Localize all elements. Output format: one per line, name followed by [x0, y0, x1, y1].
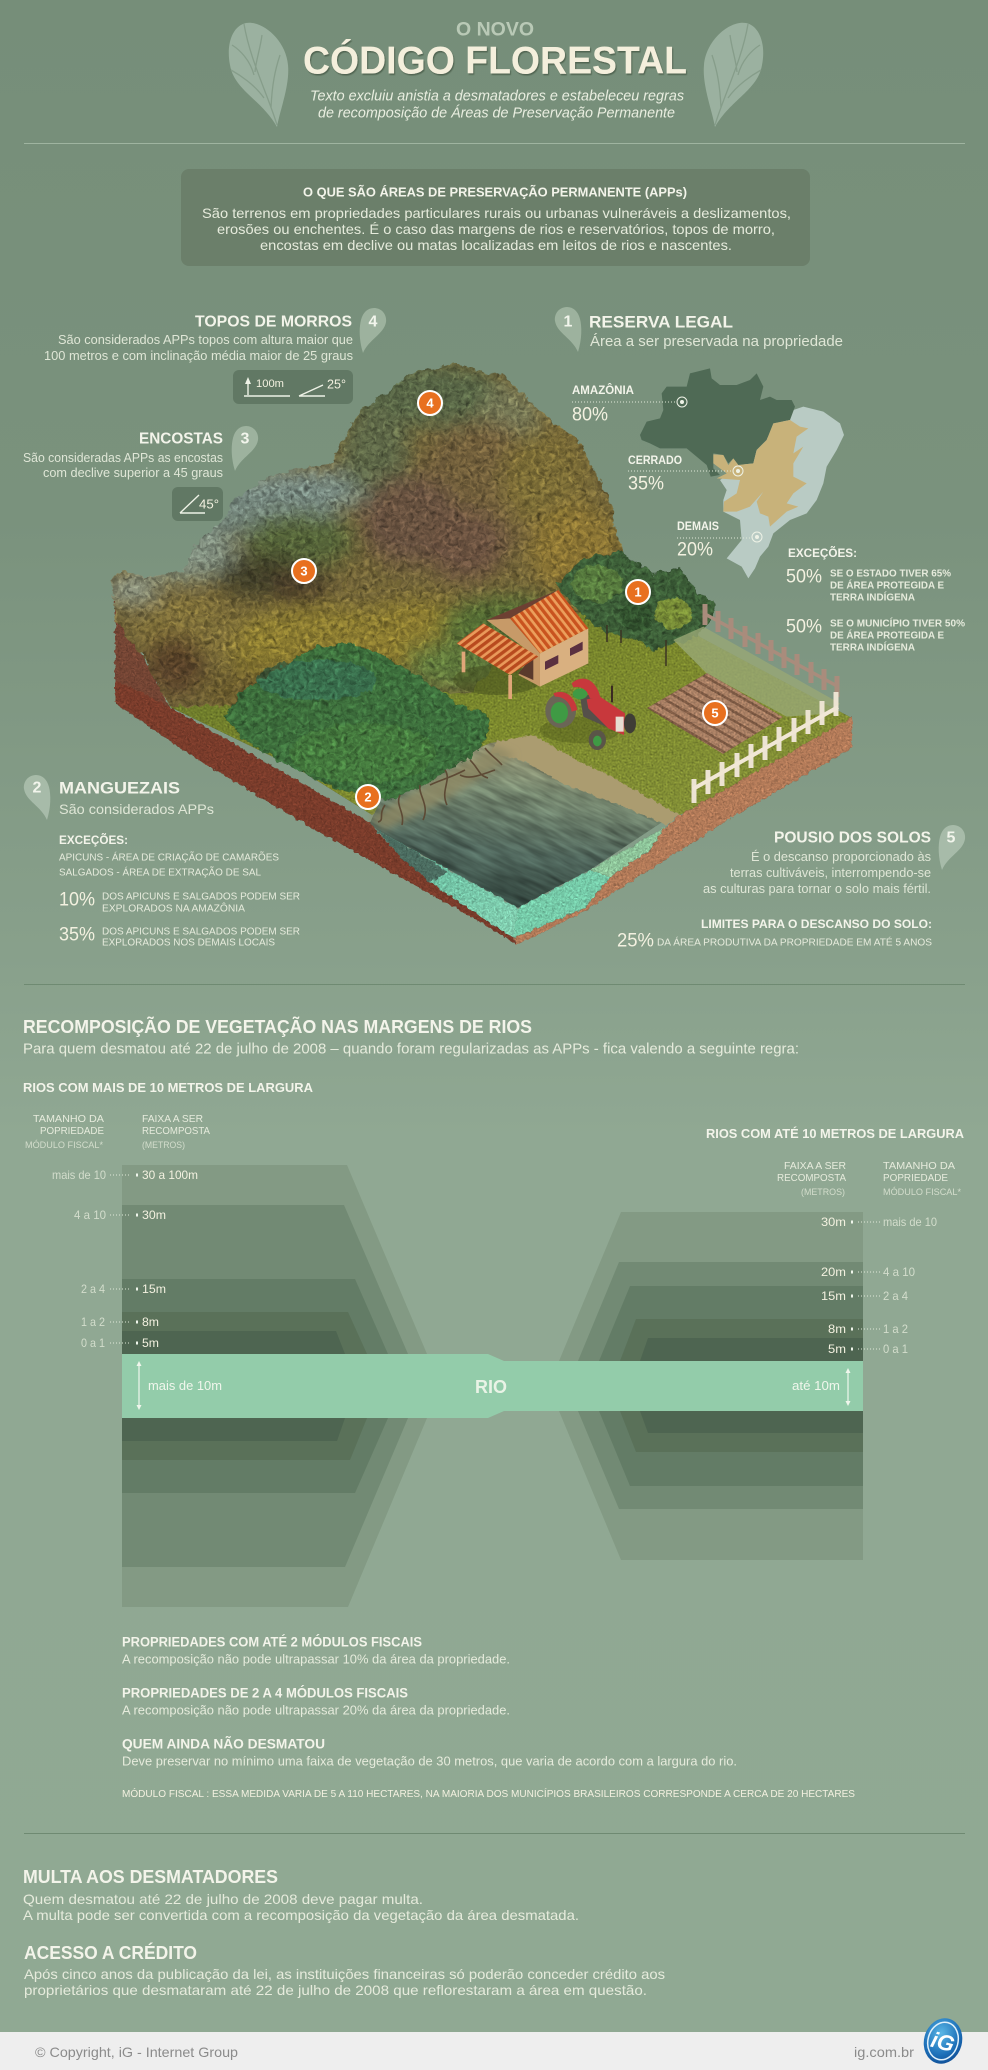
section heading: recomposição: [23, 1016, 799, 1058]
block: topos de morros: [44, 308, 386, 404]
exception 2: TERRA INDÍGENA: [830, 640, 915, 654]
title: CÓDIGO FLORESTAL: [303, 38, 687, 82]
badge: 45 degrees: [172, 487, 223, 521]
footnote: módulo fiscal: MÓDULO FISCAL : ESSA MEDIDA VARIA DE 5 A 110 HECTARES, NA MAIORIA DOS MUNICÍPIOS BRASILEIROS CORRESPONDE A CERCA DE 20 HECTARES: [122, 1787, 855, 1800]
house: [453, 590, 588, 699]
subtitle: [310, 88, 684, 122]
exception 1: TERRA INDÍGENA: [830, 590, 915, 604]
limit value: DA ÁREA PRODUTIVA DA PROPRIEDADE EM ATÉ 5 ANOS: [657, 936, 932, 948]
strip header: [777, 1160, 846, 1197]
cerrado callout: [628, 455, 743, 494]
limit value: 25%: [617, 930, 654, 952]
limit value: [617, 930, 932, 952]
heading: MANGUEZAIS: [59, 778, 180, 798]
section heading: recomposição: RECOMPOSIÇÃO DE VEGETAÇÃO NAS MARGENS DE RIOS: [23, 1016, 532, 1037]
right size-to-strip labels: 4 a 10: [883, 1265, 915, 1279]
block: reserva legal: [555, 307, 843, 352]
sand shoreline: [490, 735, 680, 825]
definitions: SALGADOS - ÁREA DE EXTRAÇÃO DE SAL: [59, 866, 261, 878]
panel text: São terrenos em propriedades particulares rurais ou urbanas vulneráveis a deslizamentos,: [202, 205, 791, 221]
exception 1: [786, 566, 951, 604]
left size-to-strip labels: mais de 10: [52, 1168, 106, 1182]
amazônia callout: 80%: [572, 404, 608, 426]
heading: EXCEÇÕES:: [788, 545, 857, 560]
right size-to-strip labels: 0 a 1: [883, 1342, 908, 1356]
reserve trees: [557, 552, 715, 652]
description: com declive superior a 45 graus: [43, 466, 223, 480]
water: [305, 624, 730, 1021]
property size header: [883, 1160, 962, 1197]
panel text: [202, 205, 791, 253]
rule: até 2 módulos: PROPRIEDADES COM ATÉ 2 MÓDULOS FISCAIS: [122, 1634, 422, 1650]
rule: quem não desmatou: QUEM AINDA NÃO DESMATOU: [122, 1736, 325, 1752]
right size-to-strip labels: 1 a 2: [883, 1322, 908, 1336]
property size header: [25, 1113, 104, 1150]
property size header: MÓDULO FISCAL*: [25, 1140, 104, 1150]
badge: 100m and 25 degrees: [233, 370, 353, 404]
description: 100 metros e com inclinação média maior de 25 graus: [44, 349, 353, 363]
strip header: RECOMPOSTA: [142, 1125, 210, 1137]
icon: pin 1: [555, 307, 581, 352]
right size-to-strip labels: 2 a 4: [883, 1289, 908, 1303]
description: São considerados APPs topos com altura maior que: [58, 333, 353, 347]
left size-to-strip labels: [52, 1168, 198, 1350]
block: multa: [23, 1867, 579, 1923]
icon: pin 2: 2: [33, 780, 42, 796]
river: RIO: [475, 1377, 507, 1397]
exception 35%: [59, 924, 300, 948]
amazônia callout: AMAZÔNIA: [572, 384, 634, 397]
heading: RESERVA LEGAL: [589, 312, 733, 332]
left margin bands: [122, 1165, 427, 1607]
marker 5: 5: [711, 706, 719, 720]
marker 5: [703, 701, 727, 725]
demais callout: DEMAIS: [677, 521, 719, 533]
description: terras cultiváveis, interrompendo-se: [730, 866, 931, 880]
badge: 100m and 25 degrees: 100m: [256, 378, 284, 390]
rule: 2 a 4 módulos: A recomposição não pode ultrapassar 20% da área da propriedade.: [122, 1702, 510, 1718]
mangrove roots: [378, 748, 502, 825]
isometric illustration: [110, 362, 853, 945]
left size-to-strip labels: 2 a 4: [81, 1282, 105, 1296]
strip header: [142, 1113, 210, 1150]
icon: pin 3: [232, 426, 258, 471]
rules text: [122, 1634, 855, 1800]
description: São considerados APPs: [59, 801, 214, 817]
right size-to-strip labels: 30m: [821, 1215, 846, 1229]
header: [229, 20, 763, 127]
marker 4: 4: [426, 396, 434, 410]
multa text: Quem desmatou até 22 de julho de 2008 deve pagar multa.: [23, 1891, 423, 1907]
exception 1: 50%: [786, 566, 822, 588]
block: exceções reserva legal: [786, 545, 965, 654]
subtitle: Texto excluiu anistia a desmatadores e estabeleceu regras: [310, 88, 684, 104]
icon: pin 2: [24, 775, 50, 820]
left size-to-strip labels: 8m: [142, 1315, 159, 1329]
demais callout: 20%: [677, 540, 713, 560]
left size-to-strip labels: 30m: [142, 1208, 166, 1222]
right size-to-strip labels: 15m: [821, 1289, 846, 1303]
right size-to-strip labels: [821, 1215, 937, 1356]
description: Área a ser preservada na propriedade: [590, 333, 843, 350]
wide river heading: RIOS COM MAIS DE 10 METROS DE LARGURA: [23, 1081, 313, 1095]
description: [23, 451, 223, 480]
hill forest: [110, 362, 624, 708]
rule: quem não desmatou: [122, 1736, 737, 1768]
strip header: FAIXA A SER: [142, 1113, 203, 1125]
cerrado callout: CERRADO: [628, 455, 682, 467]
panel text: erosões ou enchentes. É o caso das margens de rios e reservatórios, topos de morro,: [217, 221, 775, 237]
rule: 2 a 4 módulos: PROPRIEDADES DE 2 A 4 MÓDULOS FISCAIS: [122, 1686, 408, 1700]
left size-to-strip labels: 30 a 100m: [142, 1168, 198, 1182]
limits label: LIMITES PARA O DESCANSO DO SOLO:: [701, 917, 932, 931]
icon: left leaf: [229, 23, 288, 127]
marker 3: 3: [300, 564, 308, 578]
multa text: A multa pode ser convertida com a recomposição da vegetação da área desmatada.: [23, 1907, 579, 1923]
back fence: [705, 604, 837, 697]
logo: [919, 2014, 967, 2068]
property size header: TAMANHO DA: [33, 1113, 104, 1125]
footer: [0, 2014, 988, 2070]
subtitle: de recomposição de Áreas de Preservação Permanente: [318, 104, 675, 122]
front fence: [693, 692, 838, 803]
description: as culturas para tornar o solo mais fértil.: [703, 882, 931, 896]
right margin bands: [559, 1212, 863, 1560]
field: fallow soil: [647, 673, 783, 754]
cerrado callout: 35%: [628, 474, 664, 494]
block: crédito: [24, 1942, 665, 1998]
multa text: [23, 1891, 579, 1923]
marker 1: [626, 580, 650, 604]
block: crédito: ACESSO A CRÉDITO: [24, 1942, 197, 1963]
block: multa: MULTA AOS DESMATADORES: [23, 1867, 278, 1887]
icon: pin 5: 5: [947, 830, 956, 846]
left size-to-strip labels: 5m: [142, 1336, 159, 1350]
marker 3: [292, 559, 316, 583]
exception 2: 50%: [786, 616, 822, 638]
narrow river width label: até 10m: [792, 1379, 840, 1393]
water front section: [377, 827, 665, 938]
crédito text: Após cinco anos da publicação da lei, as instituições financeiras só poderão conceder crédito aos: [24, 1966, 665, 1982]
map regions: [640, 368, 844, 578]
left size-to-strip labels: 1 a 2: [81, 1315, 105, 1329]
heading: ENCOSTAS: [139, 430, 223, 448]
icon: pin 5: [939, 825, 965, 870]
property size header: TAMANHO DA: [883, 1160, 955, 1172]
left size-to-strip labels: 0 a 1: [81, 1336, 105, 1350]
heading: TOPOS DE MORROS: [195, 314, 352, 330]
exception 35%: EXPLORADOS NOS DEMAIS LOCAIS: [102, 938, 275, 948]
exception 1: DE ÁREA PROTEGIDA E: [830, 578, 944, 592]
right size-to-strip labels: 20m: [821, 1265, 846, 1279]
exception 2: SE O MUNICÍPIO TIVER 50%: [830, 616, 965, 630]
map of Brazil: [572, 368, 844, 578]
exceptions label: EXCEÇÕES:: [59, 832, 128, 847]
marker 1: 1: [634, 584, 642, 600]
tree trunks: [607, 625, 666, 666]
property size header: MÓDULO FISCAL*: [883, 1187, 962, 1197]
crédito text: [24, 1966, 665, 1998]
description: [703, 849, 931, 896]
panel text: encostas em declive ou matas localizadas em leitos de rios e nascentes.: [260, 237, 732, 253]
logo: iG: [928, 2027, 957, 2057]
definitions: APICUNS - ÁREA DE CRIAÇÃO DE CAMARÕES: [59, 850, 279, 864]
strip header: (METROS): [801, 1187, 845, 1197]
wide river width label: [136, 1361, 222, 1410]
mud near mangrove: [368, 745, 515, 830]
exception 2: DE ÁREA PROTEGIDA E: [830, 628, 944, 642]
strip header: (METROS): [142, 1140, 185, 1150]
block: manguezais: [24, 775, 300, 948]
wide river width label: mais de 10m: [148, 1379, 222, 1393]
strip header: RECOMPOSTA: [777, 1172, 846, 1184]
mangrove forest: [223, 642, 490, 800]
right size-to-strip labels: 8m: [828, 1322, 846, 1336]
panel heading: O QUE SÃO ÁREAS DE PRESERVAÇÃO PERMANENTE (APPs): [303, 184, 687, 200]
tractor: [540, 679, 636, 750]
fallow area shade: [673, 627, 840, 717]
right soil face: [513, 717, 852, 945]
left size-to-strip labels: 15m: [142, 1282, 166, 1296]
block: pousio dos solos: [617, 825, 965, 952]
exception 1: SE O ESTADO TIVER 65%: [830, 568, 951, 580]
copyright: © Copyright, iG - Internet Group: [35, 2044, 238, 2060]
marker 4: [418, 391, 442, 415]
left soil face: [115, 595, 517, 945]
demais callout: [677, 521, 762, 560]
heading: POUSIO DOS SOLOS: [774, 830, 931, 846]
exception 10%: [59, 890, 300, 914]
amazônia callout: [572, 384, 687, 426]
description: São consideradas APPs as encostas: [23, 451, 223, 465]
exception 35%: 35%: [59, 924, 95, 946]
marker 2: [356, 785, 380, 809]
river: [122, 1354, 863, 1418]
icon: pin 4: 4: [369, 314, 378, 330]
grass ground: [170, 560, 852, 815]
right size-to-strip labels: mais de 10: [883, 1215, 937, 1229]
exception 10%: DOS APICUNS E SALGADOS PODEM SER: [102, 892, 300, 902]
exception 2: [786, 616, 965, 654]
icon: pin 3: 3: [241, 430, 250, 448]
badge: 100m and 25 degrees: 25°: [327, 376, 346, 392]
description: [44, 333, 353, 363]
diagram: river margins: [52, 1165, 937, 1607]
rule: até 2 módulos: [122, 1634, 510, 1666]
icon: pin 4: [360, 308, 386, 353]
chart: left column headers, wide rivers: [23, 1081, 313, 1150]
rule: quem não desmatou: Deve preservar no mínimo uma faixa de vegetação de 30 metros, que varia de acordo com a largura do rio.: [122, 1754, 737, 1768]
strip header: FAIXA A SER: [784, 1160, 846, 1172]
exception 10%: EXPLORADOS NA AMAZÔNIA: [102, 902, 245, 914]
panel: o que são APPs: [181, 169, 810, 266]
block: encostas: [23, 426, 258, 521]
icon: pin 1: 1: [564, 314, 573, 330]
narrow river width label: [792, 1368, 850, 1406]
icon: right leaf: [704, 23, 763, 127]
narrow river heading: RIOS COM ATÉ 10 METROS DE LARGURA: [706, 1126, 964, 1141]
chart: right column headers, narrow rivers: [706, 1126, 964, 1197]
left size-to-strip labels: 4 a 10: [74, 1208, 106, 1222]
eyebrow: O NOVO: [456, 20, 534, 40]
property size header: POPRIEDADE: [883, 1172, 948, 1184]
rule: até 2 módulos: A recomposição não pode ultrapassar 10% da área da propriedade.: [122, 1652, 510, 1666]
rule: 2 a 4 módulos: [122, 1686, 510, 1718]
site: ig.com.br: [854, 2044, 914, 2060]
exception 10%: 10%: [59, 890, 95, 910]
exception 35%: DOS APICUNS E SALGADOS PODEM SER: [102, 926, 300, 938]
section intro: Para quem desmatou até 22 de julho de 2008 – quando foram regularizadas as APPs - fica valendo a seguinte regra:: [23, 1040, 799, 1058]
description: É o descanso proporcionado às: [751, 849, 931, 864]
right size-to-strip labels: 5m: [828, 1342, 846, 1356]
definitions: [59, 850, 279, 878]
badge: 45 degrees: 45°: [199, 496, 219, 512]
crédito text: proprietários que desmataram até 22 de julho de 2008 que reflorestaram a área em questão.: [24, 1982, 647, 1998]
property size header: POPRIEDADE: [40, 1125, 104, 1137]
marker 2: 2: [364, 790, 372, 804]
